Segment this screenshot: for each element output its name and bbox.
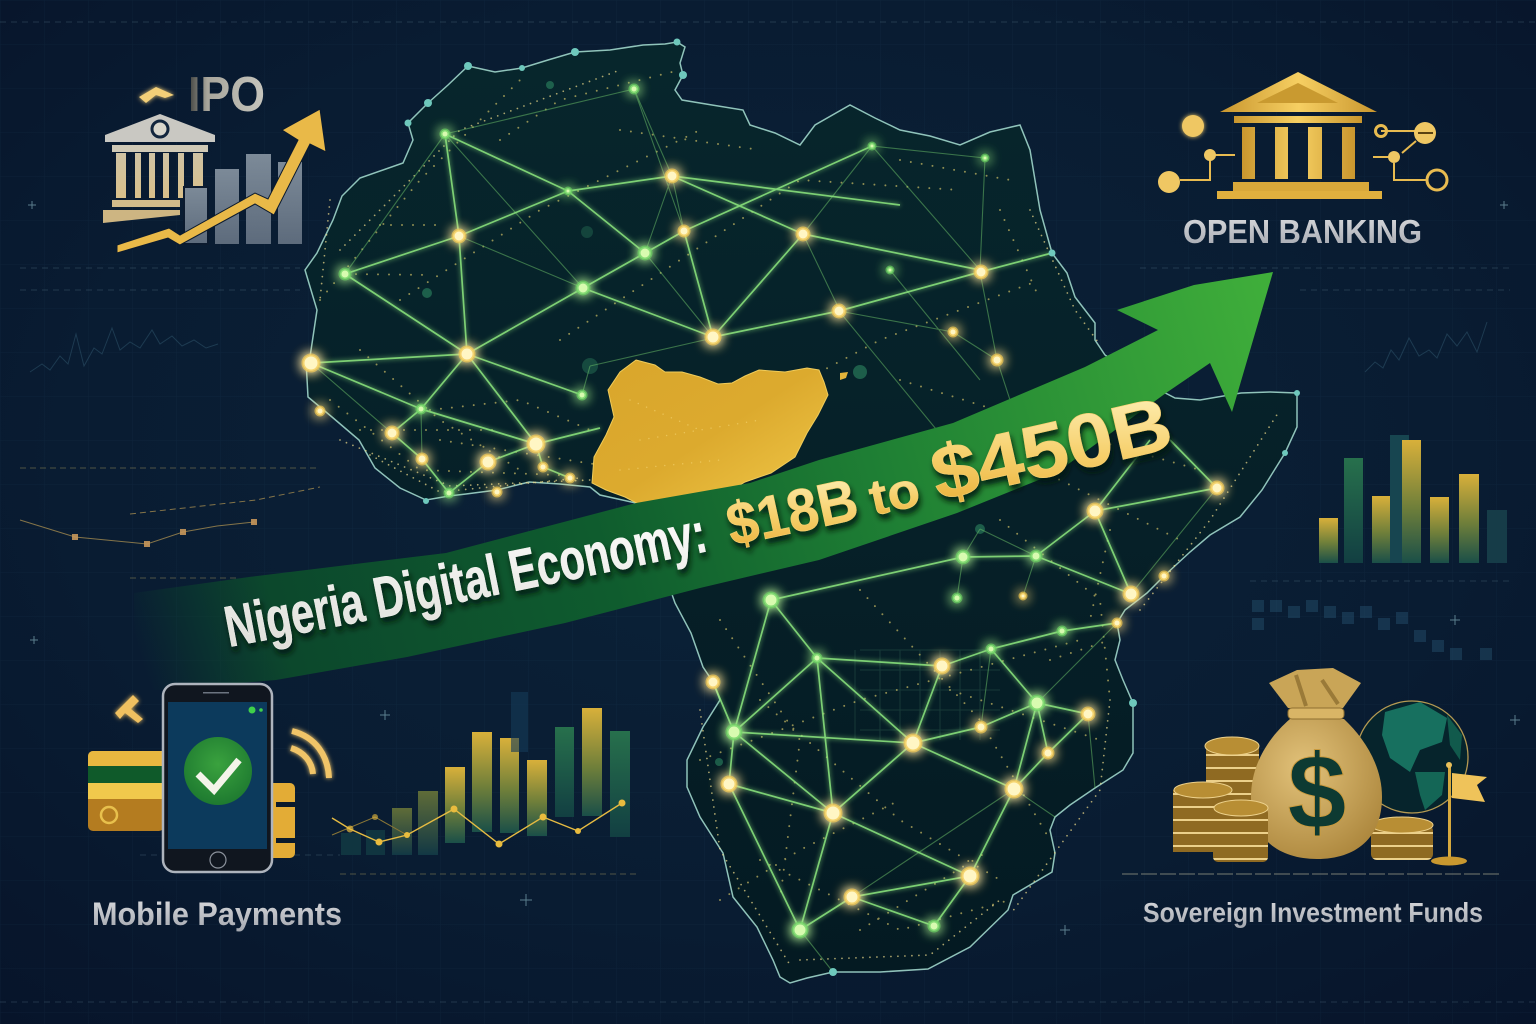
banner text [224,401,1176,658]
dollar sign: $ [1288,733,1346,851]
bright network links [311,134,1217,930]
icon: coin stacks [1173,737,1433,860]
icon: small roof [139,87,174,103]
panel: Open Banking [1158,72,1447,250]
bar chart right [1319,435,1507,563]
banner text: Nigeria Digital Economy: [224,522,710,658]
faint green blobs [422,81,985,766]
dim network links [311,89,1217,972]
rising arrow [117,109,326,253]
bar and line chart [332,692,630,855]
divider line [1122,873,1500,875]
chart bars [184,154,302,244]
icon: flag [1431,762,1487,866]
icon: smartphone [163,684,272,872]
coastal teal nodes [404,38,1300,976]
banner text: $450B [930,401,1176,510]
dim sparkline right [1365,322,1487,372]
icon: contactless waves [291,731,329,778]
icon: payment card [88,751,164,831]
Open Banking label: OPEN BANKING [1183,213,1422,250]
icon: second card edge [268,783,295,858]
data blocks [1252,600,1492,660]
dim sparkline left [30,328,218,372]
icon: check badge [184,737,252,805]
map: Africa silhouette [305,42,1297,983]
IPO label: IPO [188,68,265,122]
banner text: $18B [726,481,862,555]
banner text: to [868,480,924,522]
scattered network dots [320,70,1280,965]
network nodes [303,85,1223,937]
icon: gold bank [1217,72,1382,199]
Mobile Payments label: Mobile Payments [92,896,342,932]
icon: bank building [103,114,215,223]
growth arrow banner [148,272,1273,683]
Sovereign Investment Funds label: Sovereign Investment Funds [1143,897,1483,928]
Nigeria highlighted in gold [592,360,848,512]
fintech connector nodes [1158,115,1447,193]
icon: key mark [115,695,143,723]
icon: money bag [1251,668,1382,859]
icon: front coin stack [1213,800,1268,862]
icon: globe [1356,701,1468,813]
panel: Sovereign Investment Funds [1122,668,1500,928]
panel: Mobile Payments [88,684,342,932]
dim line chart left [20,487,320,547]
faint inner grid [855,650,1000,740]
panel: IPO [103,68,326,253]
